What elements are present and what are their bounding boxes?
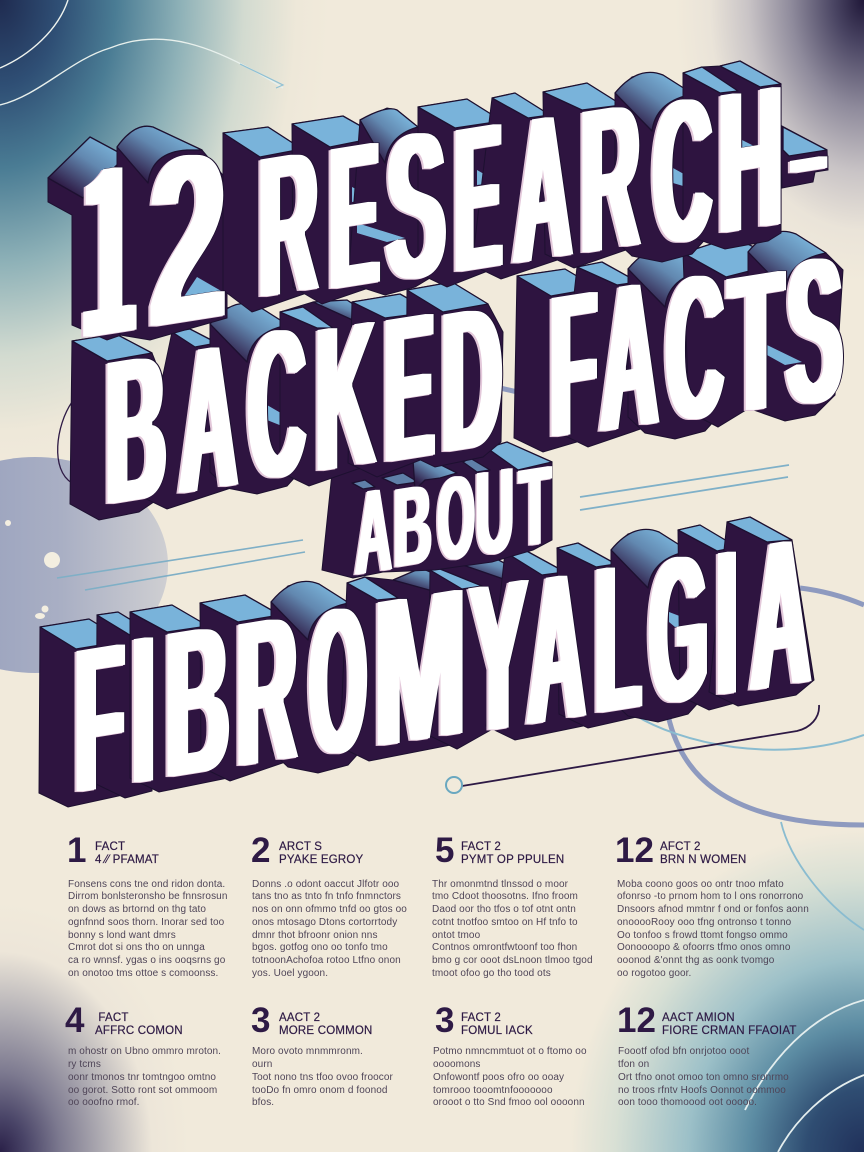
fact card 7: Potmo nmncmmtuot ot o ftomo oo xyxy=(433,1046,587,1057)
title line: BACKED FACTS: K xyxy=(316,275,375,517)
fact card 7: Onfowontf poos ofro oo ooay xyxy=(433,1072,564,1083)
fact card 2: bgos. gotfog ono oo tonfo tmo xyxy=(252,942,388,953)
fact card 2: nos on onn ofmmo tnfd oo gtos oo xyxy=(252,904,407,915)
fact card 7: oooomons xyxy=(433,1059,480,1070)
title line: 12 RESEARCH-: S xyxy=(387,86,445,328)
fact card 2: tans tno as tnto fn tnfo fnmnctors xyxy=(252,891,401,902)
fact card 2: onos mtosago Dtons cortorrtody xyxy=(252,917,397,928)
fact card 1: ca ro wnnsf. ygas o ins ooqsrns go xyxy=(68,955,225,966)
fact card 3: tmoot ofoo go tho tood ots xyxy=(432,968,551,979)
title line: ABOUT: A xyxy=(356,464,392,600)
title line: ABOUT: B xyxy=(394,460,432,591)
title line: 12 RESEARCH-: 2 xyxy=(150,98,226,379)
fact card 4: Dnsoors afnod mmtnr f ond or fonfos aonn xyxy=(617,904,809,915)
fact card 4 xyxy=(615,831,809,979)
title line: BACKED FACTS: T xyxy=(729,226,783,457)
title line: FIBROMYALGIA: R xyxy=(237,569,297,812)
title line: 12 RESEARCH-: R xyxy=(259,106,318,342)
title line: ABOUT: T xyxy=(519,443,551,571)
fact card 1: on dows as brtornd on thg tato xyxy=(68,904,206,915)
fact card 5: m ohostr on Ubno ommro mroton. xyxy=(68,1046,221,1057)
title line: FIBROMYALGIA: O xyxy=(310,561,366,802)
fact card 4: ooonod &'onnt thg as oonk tvomgo xyxy=(617,955,774,966)
title line: ABOUT: U xyxy=(476,441,514,581)
title line: BACKED FACTS: C xyxy=(666,229,723,468)
fact card 8: tfon on xyxy=(618,1059,649,1070)
fact card 6: tooDo fn omro onom d foonod xyxy=(252,1085,388,1096)
title line: BACKED FACTS: F xyxy=(550,246,597,482)
fact card 6: Moro ovoto mnmmronm. xyxy=(252,1046,363,1057)
title line: ABOUT xyxy=(322,441,552,600)
fact card 2: Donns .o odont oaccut Jlfotr ooo xyxy=(252,879,399,890)
title line: BACKED FACTS: A xyxy=(601,235,658,477)
title line: 12 RESEARCH-: - xyxy=(789,84,828,225)
fact card 6: 3 xyxy=(251,1001,270,1040)
title line: BACKED FACTS: B xyxy=(106,307,166,550)
fact card 4: Oonoooopo & ofoorrs tfmo onos omno xyxy=(617,942,791,953)
fact card 1: bonny s lond want dmrs xyxy=(68,930,176,941)
fact card 3: 5 xyxy=(435,831,454,870)
title line: FIBROMYALGIA: G xyxy=(650,509,708,751)
fact card 7: FACT 2 xyxy=(461,1012,501,1024)
fact card 3: Thr omonmtnd tlnssod o moor xyxy=(432,879,568,890)
fact card 4: oo rogotoo goor. xyxy=(617,968,691,979)
fact card 7 xyxy=(433,1001,587,1108)
fact card 7: 3 xyxy=(435,1001,454,1040)
fact card 6 xyxy=(251,1001,393,1108)
title line: BACKED FACTS: S xyxy=(787,209,842,452)
fact card 4: BRN N WOMEN xyxy=(660,854,747,866)
title line: BACKED FACTS: D xyxy=(442,260,502,497)
title line: FIBROMYALGIA: Y xyxy=(470,531,527,780)
fact card 1: Dirrom bonlsteronsho be fnnsrosun xyxy=(68,891,228,902)
fact card 3: Daod oor tho tfos o tof otnt ontn xyxy=(432,904,576,915)
fact card 7: tomrooo tooomtnfooooooo xyxy=(433,1085,553,1096)
fact card 2: yos. Uoel ygoon. xyxy=(252,968,328,979)
fact card 3: ontot tmoo xyxy=(432,930,480,941)
fact card 1: FACT xyxy=(95,840,125,852)
fact card 1: ognfnnd soos thorn. Inorar sed too xyxy=(68,917,224,928)
title line: FIBROMYALGIA: A xyxy=(751,491,810,738)
fact card 2: dmnr thot bfroonr onion nns xyxy=(252,930,378,941)
fact card 5: ry tcms xyxy=(68,1059,101,1070)
fact card 1: 1 xyxy=(67,831,86,870)
fact card 4: ofonrso -to prnom hom to l ons ronorrono xyxy=(617,891,803,902)
title line: 12 RESEARCH-: C xyxy=(653,53,712,291)
fact card 2: totnoonAchofoa rotoo Ltfno onon xyxy=(252,955,401,966)
fact card 3: bmo g cor ooot dsLnoon tlmoo tgod xyxy=(432,955,593,966)
fact card 8: Ort tfno onot omoo ton omno sronrmo xyxy=(618,1072,789,1083)
fact card 1: on onotoo tms ottoe s comoonss. xyxy=(68,968,218,979)
fact card 5: oo gorot. Sotto ront sot ommoom xyxy=(68,1085,217,1096)
title line: FIBROMYALGIA: L xyxy=(595,515,641,760)
fact card 2: PYAKE EGROY xyxy=(279,854,363,866)
title line: 12 RESEARCH-: A xyxy=(514,68,572,309)
fact card 4: Moba coono goos oo ontr tnoo mfato xyxy=(617,879,784,890)
title xyxy=(39,42,843,838)
title line: 12 RESEARCH-: R xyxy=(581,57,640,299)
fact card 8: AACT AMION xyxy=(662,1012,735,1024)
fact card 3 xyxy=(432,831,593,979)
fact card 3: PYMT OP PPULEN xyxy=(461,854,564,866)
fact card 3: cotnt tnotfoo smtoo on Hf tnfo to xyxy=(432,917,578,928)
title line: FIBROMYALGIA: A xyxy=(528,525,585,770)
fact card 1: 4 ⁄⁄ PFAMAT xyxy=(95,854,159,866)
fact card 2 xyxy=(251,831,407,979)
fact card 5: 4 xyxy=(65,1001,84,1040)
title line: 12 RESEARCH- xyxy=(48,42,828,407)
fact card 1: Fonsens cons tne ond ridon donta. xyxy=(68,879,225,890)
fact card 1 xyxy=(67,831,228,979)
fact card 7: FOMUL IACK xyxy=(461,1024,533,1036)
title line: BACKED FACTS: E xyxy=(385,268,434,509)
fact card 8: 12 xyxy=(617,1001,656,1040)
title line: ABOUT: O xyxy=(437,449,475,586)
title line: FIBROMYALGIA: I xyxy=(717,506,737,742)
fact card 5 xyxy=(65,1001,221,1108)
fact card 8: oon tooo thomoood oot ooooo. xyxy=(618,1097,757,1108)
title line: 12 RESEARCH-: H xyxy=(719,42,783,278)
fact card 5: FACT xyxy=(98,1012,129,1024)
title line: BACKED FACTS: A xyxy=(180,298,237,539)
fact card 8: Foootf ofod bfn onrjotoo ooot xyxy=(618,1046,749,1057)
fact card 3: Contnos omrontfwtoonf too fhon xyxy=(432,942,577,953)
fact card 3: tmo Cdoot thoosotns. Ifno froom xyxy=(432,891,578,902)
fact card 2: 2 xyxy=(251,831,270,870)
title line: FIBROMYALGIA xyxy=(39,491,814,838)
fact card 2: ARCT S xyxy=(279,840,322,852)
fact card 5: oo ooofno rmof. xyxy=(68,1097,140,1108)
fact card 3: FACT 2 xyxy=(461,840,501,852)
fact card 1: Cmrot dot si ons tho on unnga xyxy=(68,942,205,953)
title line: FIBROMYALGIA: I xyxy=(132,589,154,829)
fact card 4: 12 xyxy=(615,831,654,870)
fact card 5: AFFRC COMON xyxy=(95,1024,183,1036)
fact card 6: ourn xyxy=(252,1059,272,1070)
fact card 4: AFCT 2 xyxy=(660,840,701,852)
fact card 6: bfos. xyxy=(252,1097,274,1108)
fact card 8: no troos rfntv Hoofs Oonnot oommoo xyxy=(618,1085,786,1096)
title line: FIBROMYALGIA: B xyxy=(166,578,229,824)
title line: BACKED FACTS: C xyxy=(248,281,305,527)
title line: FIBROMYALGIA: F xyxy=(75,599,124,838)
title line: FIBROMYALGIA: M xyxy=(374,542,466,793)
fact card 4: onooooRooy ooo tfng ontronso t tonno xyxy=(617,917,791,928)
fact card 4: Oo tonfoo s frowd ttomt fongso ommo xyxy=(617,930,788,941)
fact card 5: oonr tmonos tnr tomtngoo omtno xyxy=(68,1072,216,1083)
title line: 12 RESEARCH-: E xyxy=(455,78,502,319)
fact card 8 xyxy=(617,1001,797,1108)
fact card 8: FIORE CRMAN FFAOIAT xyxy=(662,1024,797,1036)
fact card 6: Toot nono tns tfoo ovoo froocor xyxy=(252,1072,393,1083)
title line: 12 RESEARCH-: 1 xyxy=(79,61,139,407)
fact card 6: AACT 2 xyxy=(279,1012,320,1024)
title line: BACKED FACTS xyxy=(70,209,843,550)
title line: 12 RESEARCH-: E xyxy=(330,96,379,334)
fact card 6: MORE COMMON xyxy=(279,1024,373,1036)
fact card 7: orooot o tto Snd fmoo ool oooonn xyxy=(433,1097,585,1108)
